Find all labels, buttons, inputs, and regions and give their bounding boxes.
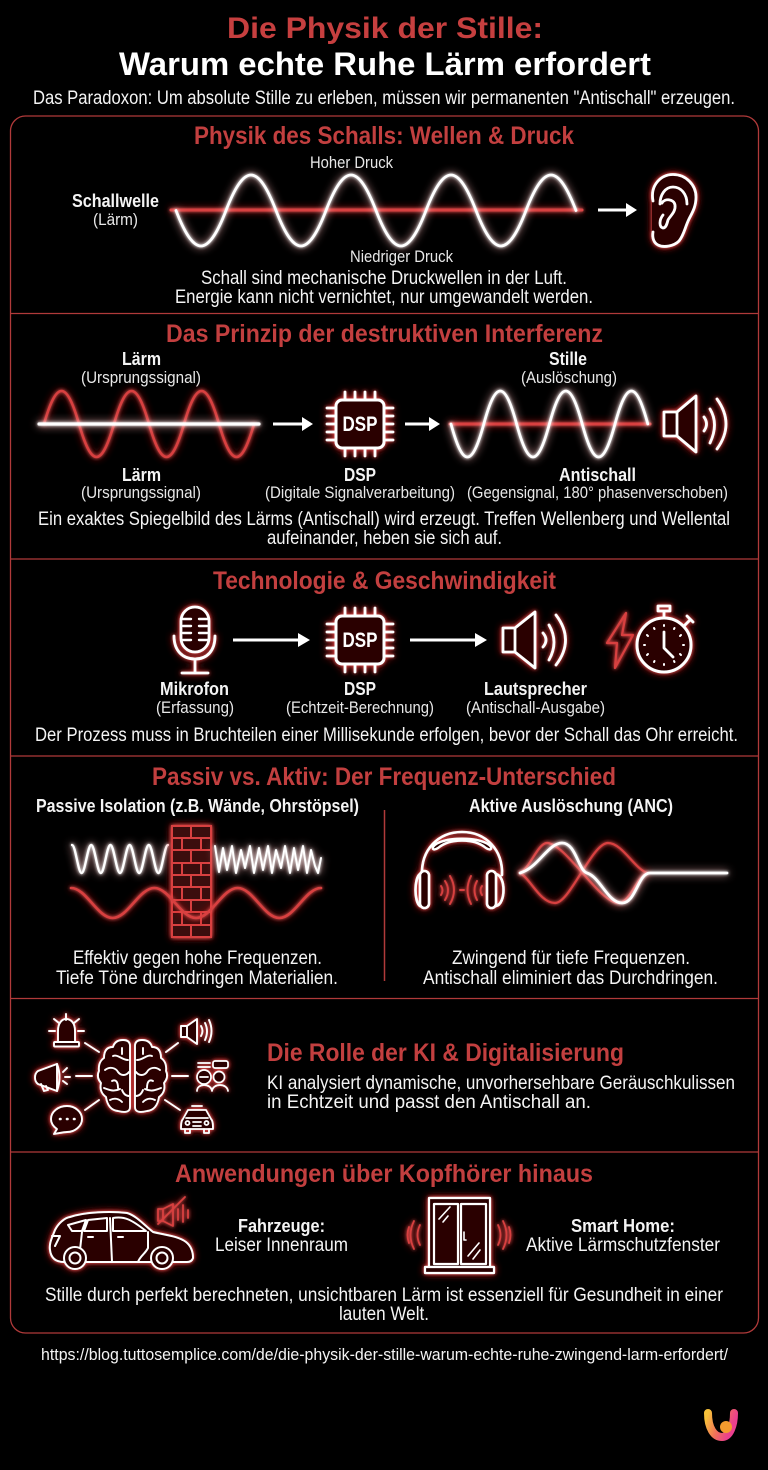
label: Lärm bottom [81, 465, 201, 502]
panel: Physik des Schalls [72, 122, 696, 308]
label: DSP: (Echtzeit-Berechnung) [286, 699, 434, 717]
icon: megaphone [35, 1064, 70, 1091]
panel: Anwendungen [45, 1160, 724, 1325]
body text [175, 268, 593, 308]
label: Schallwelle [72, 191, 159, 229]
body text: passive: Effektiv gegen hohe Frequenzen. [73, 948, 322, 969]
body text [267, 1073, 735, 1113]
icon: car [50, 1212, 193, 1269]
icon: logo [708, 1413, 734, 1437]
title [119, 12, 651, 82]
label: Schallwelle: (Lärm) [93, 211, 138, 229]
arrow [598, 203, 637, 217]
chart: anti-noise wave [450, 391, 650, 457]
icon: speaker [181, 1019, 212, 1044]
column heading: passive: Passive Isolation (z.B. Wände, Ohrstöpsel) [36, 796, 359, 816]
label: Mikrofon [156, 679, 234, 717]
panel: Technologie [35, 567, 738, 746]
heading: Anwendungen über Kopfhörer hinaus [175, 1160, 593, 1188]
body text: passive [56, 948, 338, 989]
icon: speaker [664, 396, 726, 452]
label: Fahrzeuge [215, 1216, 348, 1256]
panel: destruktive Interferenz [38, 320, 730, 549]
icon: speaker [503, 612, 566, 668]
label: Mikrofon: (Erfassung) [156, 699, 234, 717]
body text: Energie kann nicht vernichtet, nur umgewandelt werden. [175, 287, 593, 308]
icon: muted speaker [158, 1197, 188, 1226]
icon: alarm light [49, 1014, 84, 1046]
label: Hoher Druck: Hoher Druck [310, 154, 394, 172]
arrow [233, 633, 310, 647]
label: Lärm top: (Ursprungssignal) [81, 369, 201, 387]
label: Lärm top [81, 349, 201, 387]
body text: passive: Tiefe Töne durchdringen Materialien. [56, 968, 338, 989]
label: DSP: DSP [344, 679, 376, 699]
body text: in Echtzeit und passt den Antischall an. [267, 1092, 591, 1113]
label: Lärm top: Lärm [122, 349, 161, 369]
heading: Das Prinzip der destruktiven Interferenz [166, 320, 603, 348]
icon: lightning [607, 613, 633, 668]
label: Antischall: Antischall [559, 465, 636, 485]
arrow [273, 417, 313, 431]
icon: ear [652, 174, 696, 246]
body text: active [423, 948, 718, 989]
body text: active: Antischall eliminiert das Durchdringen. [423, 968, 718, 989]
column heading: active: Aktive Auslöschung (ANC) [469, 796, 673, 816]
icon: DSP chip: DSP [342, 629, 378, 652]
icon: headphones [416, 832, 504, 908]
chart: low frequency wave [71, 888, 321, 918]
arrow [405, 417, 440, 431]
label: Smart Home: Aktive Lärmschutzfenster [526, 1235, 721, 1256]
body text: aufeinander, heben sie sich auf. [267, 528, 502, 549]
icon: microphone [174, 607, 215, 673]
chart: high frequency wave before wall [72, 845, 168, 873]
icon: taxi [181, 1106, 213, 1133]
chart: ANC cancellation wave [520, 843, 727, 903]
heading: Passiv vs. Aktiv: Der Frequenz-Unterschied [152, 763, 616, 791]
icon: brain [98, 1040, 167, 1112]
panel: Passiv vs. Aktiv [36, 763, 727, 989]
body text [45, 1285, 724, 1325]
label: Lärm bottom: Lärm [122, 465, 161, 485]
heading: Technologie & Geschwindigkeit [213, 567, 557, 595]
label: Stille [521, 349, 617, 387]
icon: DSP chip [327, 608, 393, 672]
label: Stille: (Auslöschung) [521, 369, 617, 387]
heading: Physik des Schalls: Wellen & Druck [194, 122, 574, 150]
icon: DSP chip: DSP [342, 413, 378, 436]
label: Stille: Stille [549, 349, 587, 369]
label: Antischall: (Gegensignal, 180° phasenverschoben) [467, 484, 728, 502]
label: Niedriger Druck: Niedriger Druck [350, 248, 454, 266]
label: Lärm bottom: (Ursprungssignal) [81, 484, 201, 502]
label: Fahrzeuge: Fahrzeuge: [238, 1216, 325, 1236]
icon: window [425, 1198, 494, 1273]
body text: active: Zwingend für tiefe Frequenzen. [452, 948, 690, 969]
label: Mikrofon: Mikrofon [160, 679, 229, 699]
label: Smart Home: Smart Home: [571, 1216, 675, 1236]
arrow [410, 633, 487, 647]
label: Lautsprecher [466, 679, 605, 717]
body text: lauten Welt. [339, 1304, 429, 1325]
label: Antischall [467, 465, 728, 502]
label: DSP [265, 465, 455, 502]
label: DSP [286, 679, 434, 717]
label: DSP: (Digitale Signalverarbeitung) [265, 484, 455, 502]
body text [38, 509, 730, 549]
chart: attenuated high frequency wave [215, 846, 321, 873]
icon: people talking [197, 1061, 228, 1091]
title: Warum echte Ruhe Lärm erfordert [119, 46, 651, 82]
icon: chat bubble [51, 1106, 82, 1134]
label: Lautsprecher: Lautsprecher [484, 679, 587, 699]
source URL: https://blog.tuttosemplice.com/de/die-physik-der-stille-warum-echte-ruhe-zwingend-larm-erfordert/ [41, 1345, 728, 1364]
chart: sound wave [171, 175, 582, 246]
icon: stopwatch [637, 606, 693, 672]
label: Lautsprecher: (Antischall-Ausgabe) [466, 699, 605, 717]
chart: noise wave [39, 391, 259, 457]
title: Die Physik der Stille: [227, 12, 543, 45]
icon: sound waves at window [408, 1221, 510, 1249]
icon: brain network [35, 1014, 228, 1134]
label: DSP: DSP [344, 465, 376, 485]
panel: KI [35, 1014, 735, 1134]
icon: DSP chip [327, 392, 393, 456]
label: Fahrzeuge: Leiser Innenraum [215, 1235, 348, 1256]
icon: brick wall [172, 826, 211, 937]
heading: Die Rolle der KI & Digitalisierung [267, 1039, 624, 1067]
label: Smart Home [526, 1216, 721, 1256]
icon: connectors [76, 1043, 188, 1110]
body text: Schall sind mechanische Druckwellen in der Luft. [201, 268, 567, 289]
label: Schallwelle: Schallwelle [72, 191, 159, 211]
